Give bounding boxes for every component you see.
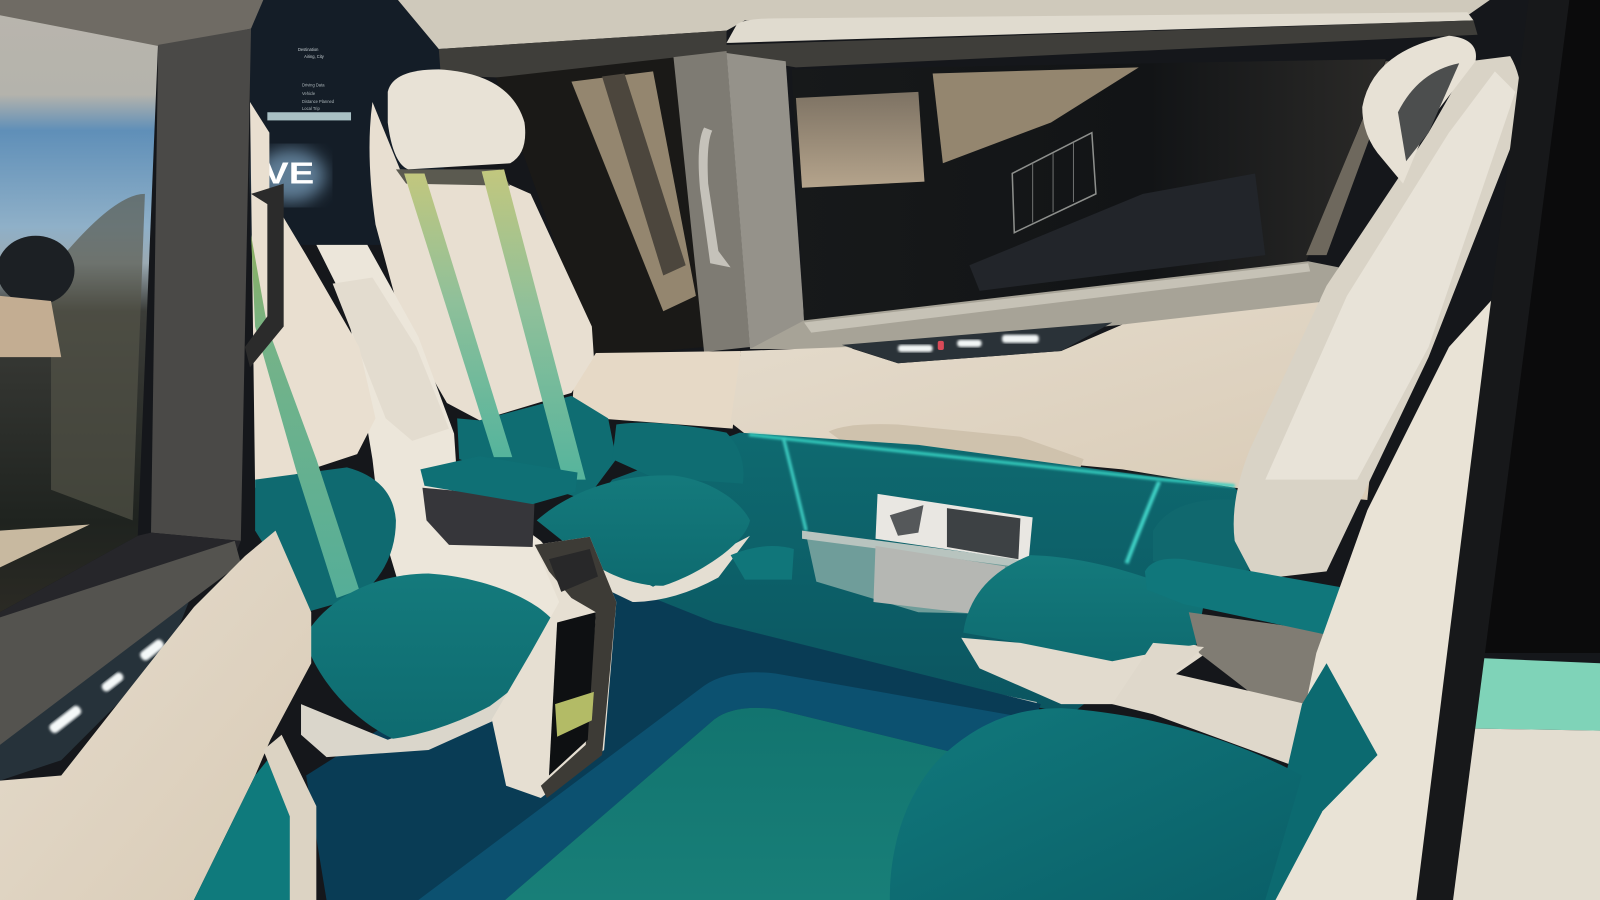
cushion (890, 708, 1302, 900)
display screen and logo: Airing, City (304, 54, 325, 59)
rear left seat (250, 102, 559, 757)
backrest (370, 102, 594, 420)
base (301, 643, 559, 757)
main window (792, 59, 1398, 322)
door pillar with handle (673, 51, 806, 352)
teal side (1257, 663, 1378, 900)
belts (404, 173, 512, 457)
shell lower lip (1298, 755, 1429, 900)
side teal panel (1153, 499, 1276, 571)
headrest (388, 69, 525, 169)
floor (306, 582, 1041, 900)
centre console shell (316, 245, 602, 633)
display screen and logo: Driving Data (302, 83, 325, 88)
armrest (420, 456, 578, 547)
belt (251, 235, 359, 598)
ceiling (398, 0, 1490, 78)
cushion (963, 555, 1204, 663)
cushion (537, 475, 750, 586)
display screen and logo (250, 0, 444, 245)
window sill (750, 261, 1339, 349)
fold-out tray (829, 424, 1084, 469)
teal back pad (457, 396, 616, 500)
headrest (1362, 36, 1476, 184)
LED control strip (842, 322, 1112, 363)
rear window (496, 57, 704, 357)
right mid seat (961, 36, 1522, 704)
display screen and logo: Destination (298, 47, 318, 52)
footrest teal (731, 546, 794, 580)
display screen and logo: VE (263, 157, 314, 191)
cushion base (594, 536, 750, 602)
teal back pad (255, 467, 396, 612)
display screen and logo: Distance Planned (302, 99, 334, 104)
cream wall panels (571, 302, 1388, 500)
right door pillar (1416, 0, 1569, 900)
display screen and logo: Local Trip (302, 106, 320, 111)
left window (0, 10, 158, 612)
cushion (304, 573, 556, 739)
shell (1265, 291, 1500, 900)
display screen and logo: Vehicle (302, 91, 316, 96)
left pillar and window frame (0, 0, 284, 781)
centre console cup unit (492, 537, 616, 798)
right vehicle exterior (1449, 0, 1600, 900)
rear centre seat (370, 69, 794, 602)
brochure in door pocket (873, 494, 1033, 616)
teal lower door (571, 433, 1286, 714)
right armrest (1112, 559, 1355, 770)
backrest shell (1234, 56, 1522, 580)
left door panel (0, 531, 316, 900)
side wing pad (612, 423, 744, 484)
backrest (250, 102, 376, 488)
LED strip left (48, 638, 166, 735)
right front seat (890, 291, 1500, 900)
